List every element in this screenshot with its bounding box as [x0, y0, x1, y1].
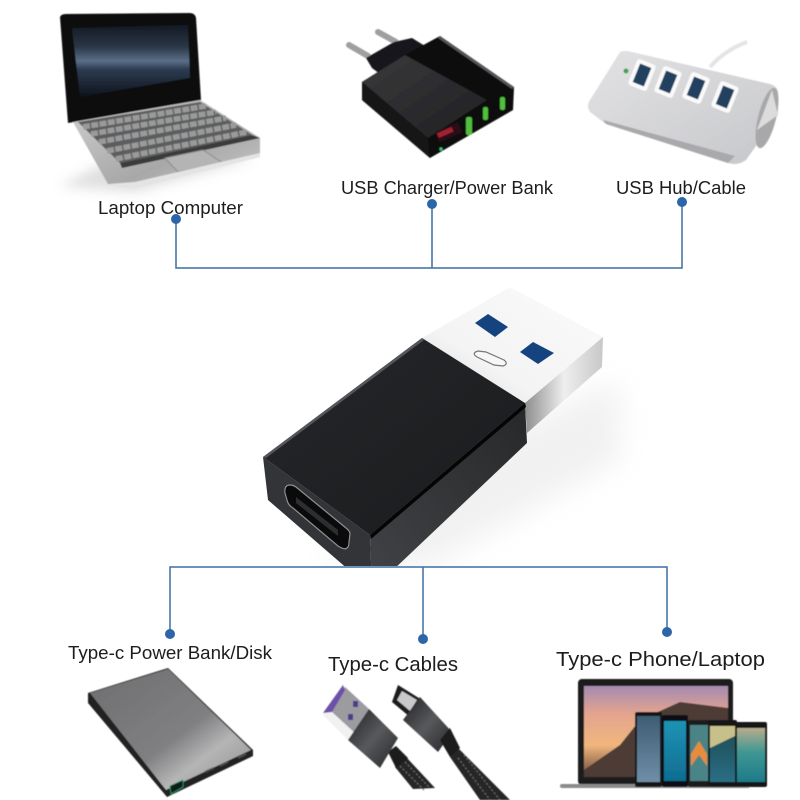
icon: USB charger: [349, 32, 514, 158]
icon: type-c phones and laptop: [560, 679, 767, 788]
icon: type-c power bank: [88, 668, 253, 797]
connector: lower bracket: [165, 567, 672, 644]
label: USB Hub/Cable: USB Hub/Cable: [616, 178, 746, 198]
label: USB Charger/Power Bank: USB Charger/Power Bank: [341, 178, 554, 198]
icon: USB hub: [588, 42, 783, 164]
image: USB-A to Type-C adapter: [263, 296, 616, 566]
label: Type-c Cables: Type-c Cables: [328, 653, 458, 676]
icon: type-c cables: [323, 685, 510, 800]
icon: laptop computer: [60, 13, 260, 192]
label: Laptop Computer: Laptop Computer: [98, 198, 243, 218]
connector: upper bracket: [171, 197, 687, 268]
label: Type-c Power Bank/Disk: Type-c Power Bank/Disk: [68, 642, 273, 663]
label: Type-c Phone/Laptop: Type-c Phone/Laptop: [556, 649, 765, 671]
